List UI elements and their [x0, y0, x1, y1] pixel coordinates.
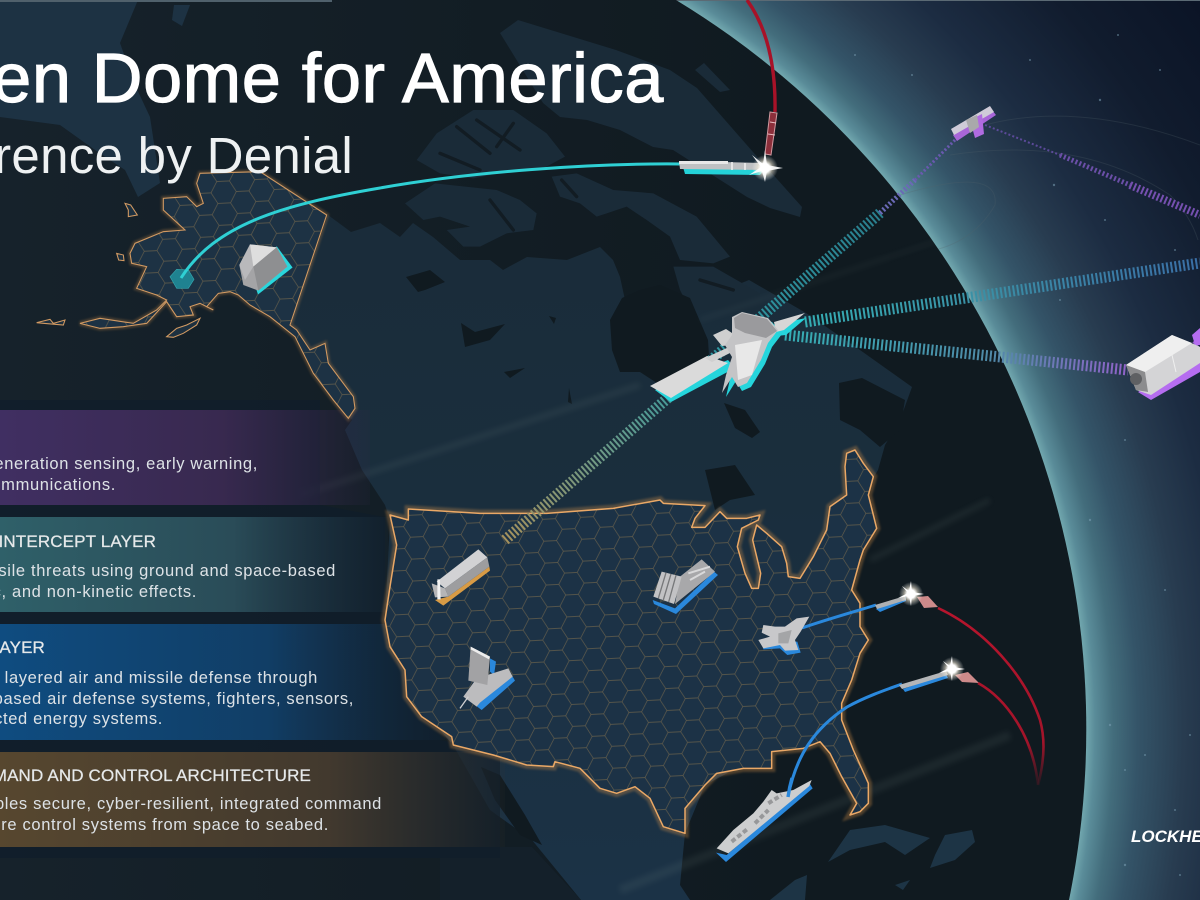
panel heading: intercept layer: INTERCEPT LAYER: [0, 532, 156, 551]
arc: incoming red missile from top: [747, 0, 775, 112]
icon: ground radar building: [432, 549, 490, 606]
panel text: command and control description: [0, 795, 382, 834]
panel: missile intercept layer: [0, 517, 388, 612]
icon: upper east-coast interceptor strike: [875, 581, 938, 612]
icon: large purple satellite: [1126, 328, 1200, 400]
arc: ship launch overlay: [788, 778, 792, 797]
panel text: defense description: [0, 669, 354, 728]
icon: main satellite: [650, 312, 806, 402]
beam: main satellite to sensor satellite: [785, 335, 1128, 370]
beam: ground radar to space: [505, 140, 955, 540]
icon: navy ship: [716, 780, 813, 862]
arc: upper incoming red missile: [938, 608, 1044, 785]
map: Alaska hex outline: [37, 160, 363, 427]
arc: ship interceptor: [788, 684, 902, 797]
icon: missile launcher: [653, 559, 718, 614]
icon: lower east-coast interceptor strike: [899, 656, 979, 692]
icon: Alaska radome: [239, 244, 292, 293]
panel text: sensing description: [0, 455, 258, 494]
panel: space-based sensing layer: [0, 410, 370, 505]
panel: air defense layer: [0, 624, 445, 740]
arc: lower incoming red missile: [978, 683, 1038, 785]
beam: main satellite to the right edge: [805, 263, 1200, 322]
icon: small purple satellite: [951, 106, 996, 141]
panel: command and control: [0, 752, 505, 847]
panel backing band: [0, 400, 500, 858]
beam: small satellite to the right: [985, 125, 1200, 215]
icon: F-35 fighter: [758, 617, 809, 655]
arc: fighter interceptor: [802, 605, 876, 628]
icon: mobile radar: [460, 647, 515, 710]
panel text: intercept description: [0, 562, 336, 601]
beam: sensor satellite stub: [1190, 342, 1200, 352]
map: continental US hex outline: [380, 440, 887, 840]
arc: interceptor from Alaska: [181, 164, 682, 278]
icon: Arctic interceptor strike: [679, 112, 783, 182]
